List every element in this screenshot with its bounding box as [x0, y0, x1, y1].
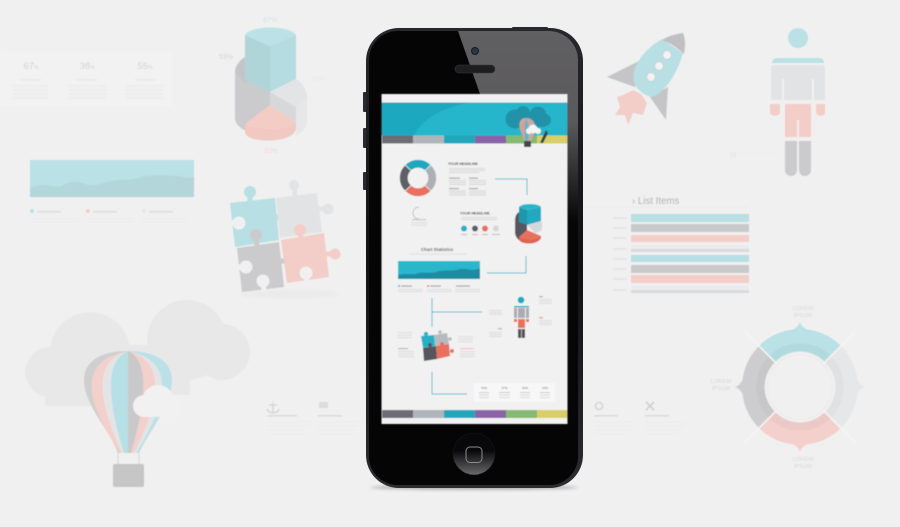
icon: puzzle — [228, 180, 340, 292]
small area band — [398, 261, 480, 279]
icon: person — [729, 28, 825, 176]
ring label top: LOREM — [793, 306, 813, 312]
heading rule — [409, 254, 467, 255]
small stat 4: 15% — [542, 386, 548, 390]
list bars — [631, 214, 749, 293]
header clouds — [506, 106, 551, 128]
label 32%: 32% — [264, 148, 278, 155]
small ring chart — [399, 159, 437, 197]
label 53%: 53% — [219, 54, 233, 61]
stat 38%: Your Opinion — [77, 78, 97, 82]
small band legend — [398, 285, 480, 292]
headline 2: YOUR HEADLINE — [460, 212, 490, 216]
person head — [788, 28, 808, 48]
stat 67%: 67% — [23, 61, 39, 72]
ring segment: gray — [735, 346, 775, 428]
rocket right fin — [650, 87, 668, 120]
person callouts — [489, 296, 552, 337]
info block: gear — [594, 402, 634, 434]
info block: anchor — [267, 402, 310, 434]
ring label bottom: IPSUM — [794, 464, 812, 470]
stat 67%: Your Opinion — [21, 78, 41, 82]
ring label bottom: LOREM — [793, 457, 813, 463]
info block: monitor — [318, 402, 358, 434]
person torso and arms — [771, 65, 825, 100]
person shoulders — [772, 58, 824, 63]
header figures — [540, 130, 548, 143]
phone shadow — [370, 485, 578, 490]
rocket nose — [662, 33, 685, 54]
stat 67% — [13, 61, 48, 99]
rocket body — [634, 39, 683, 97]
puzzle holes — [228, 216, 312, 292]
puzzle piece: salmon — [281, 224, 340, 283]
header colour strip — [382, 136, 568, 144]
panel: percentage stats — [0, 51, 172, 106]
list heading: › List Items — [632, 196, 680, 207]
phone body — [366, 28, 583, 488]
header balloon — [520, 118, 535, 147]
label 87%: 87% — [263, 17, 277, 24]
connector lines — [432, 179, 527, 394]
chart: faded isometric cylinder — [219, 17, 325, 155]
label 11%: 11% — [311, 76, 325, 83]
person hands — [770, 104, 780, 116]
phone speaker — [455, 65, 495, 73]
stat 55% — [126, 61, 163, 99]
headline 1 copy — [449, 168, 486, 196]
stat 55%: 55% — [137, 61, 153, 72]
small puzzle — [421, 330, 454, 361]
stat 38%: 38% — [79, 61, 95, 72]
panel: list items — [585, 196, 749, 293]
person callout line — [737, 153, 783, 155]
ring segment: salmon — [759, 412, 841, 452]
footer colour strip — [382, 410, 568, 418]
phone camera — [472, 48, 478, 54]
rocket flame — [615, 90, 647, 125]
small stat 2: 37% — [501, 386, 508, 390]
legend circles — [461, 226, 500, 235]
rocket left fin — [607, 61, 639, 87]
chart: faded area band — [30, 160, 194, 197]
balloon ropes — [118, 453, 139, 465]
list row labels — [613, 217, 627, 291]
puzzle piece: light gray — [276, 180, 334, 238]
stat 38% — [69, 61, 106, 99]
puzzle piece: teal — [230, 186, 288, 247]
small gauge — [411, 207, 427, 226]
small cylinder chart — [515, 204, 542, 244]
puzzle callouts — [397, 332, 475, 357]
info block: tools — [645, 402, 685, 434]
ring segment: light gray — [825, 346, 865, 428]
small stats box — [474, 383, 555, 402]
rocket windows — [647, 51, 671, 81]
person shorts — [785, 104, 811, 137]
icon: rocket — [607, 33, 685, 125]
icon: hot air balloon — [84, 350, 172, 488]
header band — [382, 102, 568, 147]
balloon basket — [113, 464, 144, 487]
puzzle piece: dark gray — [237, 229, 296, 292]
small stat 3: 35% — [522, 386, 528, 390]
legend under area band — [30, 209, 189, 222]
headline 2 copy — [461, 217, 497, 220]
ring centre — [768, 354, 832, 420]
puzzle shadow — [240, 291, 340, 297]
headline 1: YOUR HEADLINE — [448, 162, 478, 166]
header small cloud — [526, 124, 541, 134]
person legs — [785, 141, 797, 176]
chart: faded ring — [711, 306, 865, 470]
home button — [453, 433, 495, 475]
ring label top: IPSUM — [794, 313, 812, 319]
ring segment: teal — [759, 322, 841, 362]
glass reflection — [458, 31, 578, 214]
person callout value: 15 — [729, 152, 737, 159]
phone — [363, 27, 585, 488]
screen: embedded infographic — [382, 94, 568, 424]
stat 55%: Your Opinion — [135, 78, 155, 82]
ring label left: LOREM — [711, 379, 731, 385]
icon: small cloud — [133, 385, 183, 417]
small stat 1: 75% — [481, 386, 487, 390]
chart statistics heading: Chart Statistics — [421, 247, 454, 252]
phone side buttons — [363, 27, 548, 190]
small person — [514, 297, 529, 338]
icon: clouds behind balloon — [25, 300, 250, 406]
ring label left: IPSUM — [712, 386, 730, 392]
